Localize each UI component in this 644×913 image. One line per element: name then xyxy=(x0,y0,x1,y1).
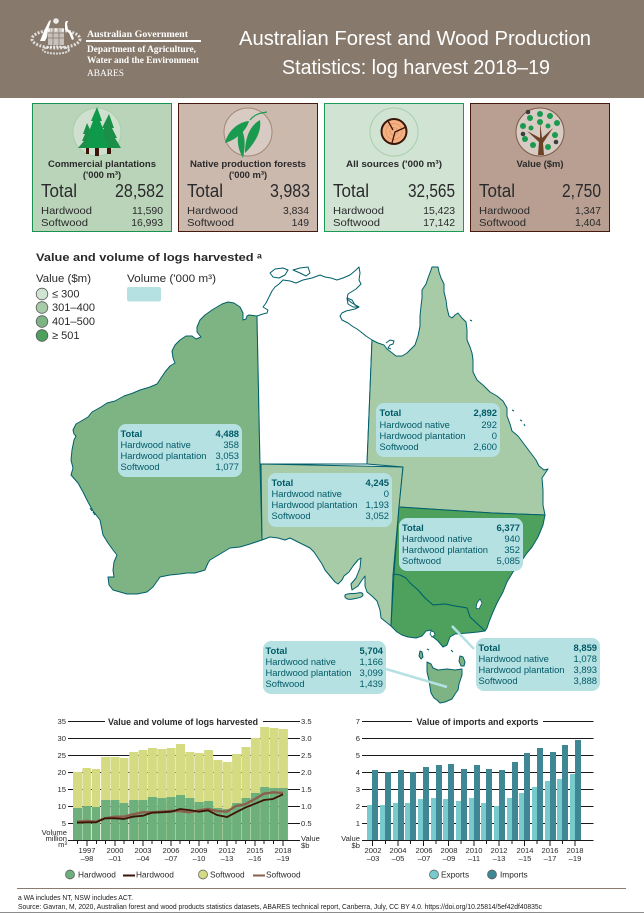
panel: commercial plantations: Softwood xyxy=(41,218,88,229)
footnotes: Source: Gavran, M, 2020, Australian forest and wood products statistics datasets, ABARES technical report, Canberra, July, CC BY 4.0. https://doi.org/10.25814/5ef42df40835c xyxy=(18,902,542,911)
title xyxy=(239,27,591,79)
right axis labels: 1.5 xyxy=(301,785,312,794)
Northern Territory xyxy=(257,267,372,464)
x labels: 2006 xyxy=(416,846,432,855)
map legend xyxy=(36,273,216,342)
y axis labels: 1 xyxy=(356,819,360,828)
callout: Queensland: Hardwood native xyxy=(380,419,450,430)
leader line: Victoria xyxy=(452,626,474,649)
panel: all sources xyxy=(324,104,464,232)
callout: Victoria: 3,888 xyxy=(574,675,597,686)
x labels: –19 xyxy=(277,854,289,863)
King Island and Flinders Island xyxy=(419,651,465,666)
chart title: Value of imports and exports xyxy=(416,717,538,727)
panel: native production forests: Total xyxy=(187,181,223,201)
callout: Queensland: 0 xyxy=(492,430,497,441)
map legend: ≤ 300 xyxy=(52,288,79,300)
x labels: 2002 xyxy=(365,846,381,855)
callout: Western Australia: 4,488 xyxy=(216,428,239,439)
chart legend: Softwood xyxy=(210,870,245,880)
government wordmark: ABARES xyxy=(87,68,124,78)
callout: South Australia: Total xyxy=(272,477,293,488)
left axis labels: 5 xyxy=(62,819,66,828)
callout: Western Australia xyxy=(118,424,242,477)
x labels: 2016 xyxy=(542,846,558,855)
callout: New South Wales: Softwood xyxy=(402,555,441,566)
x labels: –15 xyxy=(519,854,531,863)
y axis labels: $b xyxy=(352,841,360,850)
x labels: –03 xyxy=(367,854,379,863)
left axis labels: 25 xyxy=(58,751,66,760)
right axis labels: $b xyxy=(301,841,309,850)
callout: Tasmania: 3,099 xyxy=(360,667,383,678)
right axis labels: 0.5 xyxy=(301,819,312,828)
callout: Victoria xyxy=(476,638,600,691)
callout: Western Australia: Hardwood native xyxy=(120,439,191,450)
panel: value: Value ($m) xyxy=(517,158,563,169)
exports bars xyxy=(367,774,576,840)
x labels xyxy=(79,846,291,863)
Wellesley islands xyxy=(386,340,394,349)
lake and bay cut-outs xyxy=(430,599,482,637)
left axis labels: 30 xyxy=(58,734,66,743)
x ticks xyxy=(78,840,283,846)
x labels: 2018 xyxy=(567,846,583,855)
right axis labels: 2.0 xyxy=(301,768,312,777)
right axis labels: 3.5 xyxy=(301,717,312,726)
callout: Western Australia: 1,077 xyxy=(216,461,239,472)
x labels: –19 xyxy=(569,854,581,863)
government wordmark: Department of Agriculture, xyxy=(87,44,196,54)
panel: commercial plantations: 28,582 xyxy=(115,181,164,201)
chart: value of imports and exports xyxy=(341,717,594,880)
map legend: Value ($m) xyxy=(36,273,91,285)
Western Australia xyxy=(71,302,262,594)
hardwood value line xyxy=(77,794,283,823)
left axis labels: million xyxy=(45,834,67,843)
chart title: Value and volume of logs harvested xyxy=(108,717,258,727)
callout: Queensland: Softwood xyxy=(380,441,419,452)
callout: New South Wales: 352 xyxy=(504,544,520,555)
callout: Tasmania: 1,166 xyxy=(360,656,383,667)
panel: native production forests: Softwood xyxy=(187,218,234,229)
chart legend: Hardwood xyxy=(78,870,116,880)
callout: Victoria: Total xyxy=(478,642,500,653)
x labels: –17 xyxy=(544,854,556,863)
government wordmark xyxy=(86,30,201,78)
map legend: ≥ 501 xyxy=(52,330,79,342)
x labels: 2000 xyxy=(107,846,123,855)
x labels: –04 xyxy=(137,854,149,863)
callout: New South Wales: 940 xyxy=(504,533,520,544)
left axis labels xyxy=(42,717,67,849)
callout: Victoria: 3,893 xyxy=(574,664,597,675)
y axis labels: 6 xyxy=(356,734,360,743)
callout: South Australia: 4,245 xyxy=(366,477,389,488)
x labels: –07 xyxy=(165,854,177,863)
left axis labels: 10 xyxy=(58,802,66,811)
government wordmark: Australian Government xyxy=(87,30,189,40)
panel: value: 1,347 xyxy=(575,206,601,217)
x labels: 2003 xyxy=(135,846,151,855)
softwood value line xyxy=(77,792,283,822)
y axis labels: 3 xyxy=(356,785,360,794)
Tasmania xyxy=(427,662,462,703)
softwood bars xyxy=(73,727,288,840)
x labels: 2012 xyxy=(219,846,235,855)
x labels: –01 xyxy=(109,854,121,863)
callout: Queensland xyxy=(376,403,500,457)
panel: commercial plantations: Commercial plantations xyxy=(48,158,156,169)
panel: all sources: All sources ('000 m³) xyxy=(346,158,442,169)
panel: value: Total xyxy=(479,181,515,201)
chart legend xyxy=(430,870,528,880)
Victoria xyxy=(391,574,485,647)
callout: South Australia: 1,193 xyxy=(366,499,389,510)
x labels: 2015 xyxy=(247,846,263,855)
y axis labels: 4 xyxy=(356,768,360,777)
callout: Victoria: Softwood xyxy=(478,675,518,686)
x labels: –16 xyxy=(249,854,261,863)
chart legend: Imports xyxy=(500,870,528,880)
x labels: 2004 xyxy=(390,846,406,855)
x labels: 2012 xyxy=(491,846,507,855)
x labels: 2006 xyxy=(163,846,179,855)
callout: Tasmania: Hardwood plantation xyxy=(266,667,352,678)
imports bars xyxy=(372,740,581,840)
callout: South Australia: Hardwood plantation xyxy=(272,499,358,510)
coastal islets xyxy=(90,320,525,652)
x labels: 2018 xyxy=(275,846,291,855)
y axis labels: 7 xyxy=(356,717,360,726)
x labels: 2014 xyxy=(517,846,533,855)
callout: Tasmania xyxy=(263,641,386,694)
x labels: 2010 xyxy=(466,846,482,855)
icon: log cross-section xyxy=(370,108,418,156)
left axis labels: 20 xyxy=(58,768,66,777)
chart legend: Hardwood xyxy=(136,870,174,880)
map heading: Value and volume of logs harvested ᵃ xyxy=(36,252,263,264)
right axis labels: 3.0 xyxy=(301,734,312,743)
panel: commercial plantations: Total xyxy=(41,181,77,201)
title: Statistics: log harvest 2018–19 xyxy=(282,56,550,79)
map legend: 401–500 xyxy=(52,316,95,328)
callout: Tasmania: 1,439 xyxy=(360,678,383,689)
icon: pine trees xyxy=(73,107,121,156)
icon: money tree xyxy=(516,108,564,156)
chart legend: Exports xyxy=(441,870,469,880)
callout: South Australia: 3,052 xyxy=(366,510,389,521)
panel: value: 2,750 xyxy=(562,181,601,201)
y axis labels: 5 xyxy=(356,751,360,760)
x labels: –13 xyxy=(493,854,505,863)
panel: value: Softwood xyxy=(479,218,526,229)
callout: Western Australia: 3,053 xyxy=(216,450,239,461)
x labels: 2009 xyxy=(191,846,207,855)
callout: Victoria: 8,859 xyxy=(574,642,597,653)
right axis labels: 1.0 xyxy=(301,802,312,811)
South Australia xyxy=(261,464,403,626)
panel: native production forests: Hardwood xyxy=(187,206,238,217)
panel: value: Hardwood xyxy=(479,206,530,217)
icon: coat of arms xyxy=(32,18,80,54)
map legend: Volume ('000 m³) xyxy=(127,273,216,285)
right axis labels: 2.5 xyxy=(301,751,312,760)
callout: Queensland: Total xyxy=(380,407,401,418)
panel: commercial plantations: 11,590 xyxy=(132,206,163,217)
y axis labels xyxy=(341,717,360,850)
panel: native production forests: 3,983 xyxy=(270,181,310,201)
callout: Western Australia: 358 xyxy=(223,439,239,450)
x ticks xyxy=(372,840,575,846)
callout: Victoria: Hardwood plantation xyxy=(478,664,564,675)
callout: Queensland: 292 xyxy=(481,419,497,430)
panel: commercial plantations: 16,993 xyxy=(131,218,163,229)
x labels xyxy=(365,846,583,863)
chart: value and volume of logs harvested xyxy=(42,717,320,880)
panel: all sources: 15,423 xyxy=(423,206,455,217)
panel: commercial plantations: ('000 m³) xyxy=(83,169,121,180)
New South Wales xyxy=(394,507,545,631)
callout: Victoria: 1,078 xyxy=(574,653,597,664)
callout: Tasmania: Total xyxy=(266,645,287,656)
x labels: –13 xyxy=(221,854,233,863)
leader line: Tasmania xyxy=(386,669,447,687)
x labels: –98 xyxy=(81,854,93,863)
panel: all sources: 17,142 xyxy=(423,218,455,229)
panel: all sources: Hardwood xyxy=(333,206,384,217)
callout: Queensland: 2,600 xyxy=(474,441,497,452)
callout: South Australia: Softwood xyxy=(272,510,311,521)
x labels: –10 xyxy=(193,854,205,863)
callout: South Australia: Hardwood native xyxy=(272,488,342,499)
panel: all sources: 32,565 xyxy=(408,181,455,201)
Queensland xyxy=(367,267,548,515)
panel: commercial plantations xyxy=(32,104,172,232)
footnotes xyxy=(18,893,542,911)
callout: New South Wales: 6,377 xyxy=(497,522,520,533)
hardwood bars xyxy=(73,787,288,840)
x labels: –11 xyxy=(468,854,480,863)
footnotes: a WA includes NT, NSW includes ACT. xyxy=(18,893,133,902)
callout: New South Wales: Total xyxy=(402,522,424,533)
callout: South Australia xyxy=(268,473,392,527)
x labels: 1997 xyxy=(79,846,95,855)
callout: Tasmania: 5,704 xyxy=(360,645,384,656)
map legend: 301–400 xyxy=(52,302,95,314)
chart legend: Softwood xyxy=(266,870,301,880)
panel: all sources: Softwood xyxy=(333,218,380,229)
Tiwi and northern islands xyxy=(270,267,359,307)
x labels: –05 xyxy=(392,854,404,863)
right axis labels: Value xyxy=(301,834,320,843)
callout: Victoria: Hardwood native xyxy=(478,653,549,664)
callout: Tasmania: Hardwood native xyxy=(266,656,336,667)
callout: New South Wales: Hardwood plantation xyxy=(402,544,488,555)
callout: Queensland: Hardwood plantation xyxy=(380,430,466,441)
callout: New South Wales: Hardwood native xyxy=(402,533,472,544)
title: Australian Forest and Wood Production xyxy=(239,27,591,50)
callout: Queensland: 2,892 xyxy=(474,407,497,418)
panel: commercial plantations: Hardwood xyxy=(41,206,92,217)
panel: native production forests: 149 xyxy=(292,218,309,229)
y axis labels: Value xyxy=(341,834,360,843)
panel: value: 1,404 xyxy=(575,218,601,229)
callout: New South Wales: 5,085 xyxy=(497,555,520,566)
callout: Tasmania: Softwood xyxy=(266,678,305,689)
y axis labels: 2 xyxy=(356,802,360,811)
callout: New South Wales xyxy=(399,518,523,571)
panel: native production forests: ('000 m³) xyxy=(229,169,267,180)
icon: gum leaves xyxy=(224,108,272,158)
Kangaroo Island xyxy=(345,593,363,599)
panel: native production forests: 3,834 xyxy=(283,206,309,217)
callout: Western Australia: Hardwood plantation xyxy=(120,450,206,461)
chart legend xyxy=(66,870,301,880)
callout: Western Australia: Total xyxy=(120,428,142,439)
panel: native production forests xyxy=(178,104,318,232)
x labels: –09 xyxy=(443,854,455,863)
panel: value xyxy=(470,104,610,232)
callout: Western Australia: Softwood xyxy=(120,461,160,472)
left axis labels: Volume xyxy=(42,828,67,837)
left axis labels: m³ xyxy=(58,840,67,849)
x labels: –07 xyxy=(418,854,430,863)
header banner xyxy=(0,0,644,98)
x labels: 2008 xyxy=(441,846,457,855)
left axis labels: 15 xyxy=(58,785,66,794)
callout: South Australia: 0 xyxy=(384,488,389,499)
government wordmark: Water and the Environment xyxy=(87,55,200,65)
right axis labels xyxy=(301,717,320,850)
map of Australia xyxy=(71,267,548,703)
panel: native production forests: Native production forests xyxy=(190,158,306,169)
panel: all sources: Total xyxy=(333,181,369,201)
left axis labels: 35 xyxy=(58,717,66,726)
